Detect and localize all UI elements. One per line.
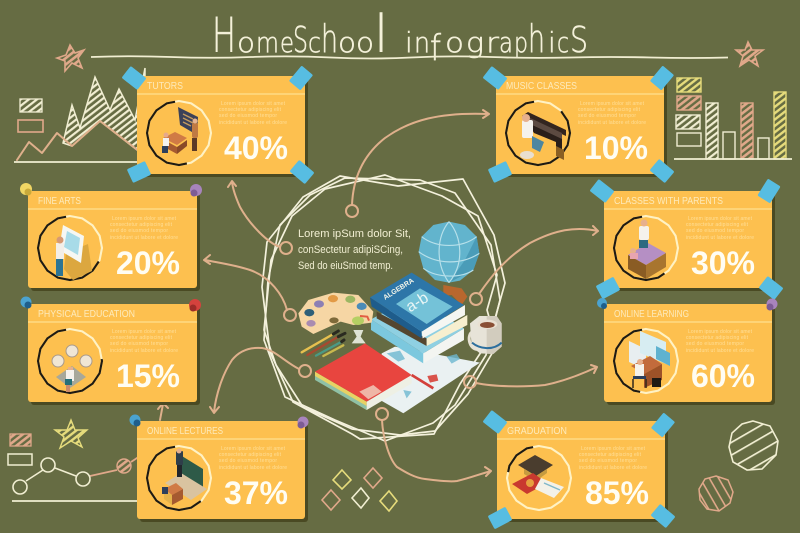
title: i [405, 26, 413, 59]
body text: sed do eiusmod tempor [579, 458, 637, 464]
pins: online learning [597, 298, 778, 310]
icon: student with screens [629, 331, 670, 388]
connector to physical education [158, 403, 168, 420]
panel: online lectures [137, 421, 308, 522]
panel heading: CLASSES WITH PARENTS [614, 196, 723, 207]
panel heading: ONLINE LEARNING [614, 309, 689, 320]
connector to classes with parents [470, 226, 598, 305]
title: i [548, 26, 556, 59]
title: c [308, 26, 321, 59]
connector to music classes [346, 110, 489, 217]
title: h [528, 17, 545, 61]
globe stand [443, 285, 467, 305]
peach hatched octagon [699, 476, 733, 511]
body text: consectetur adipiscing elit [686, 222, 749, 228]
title: S [293, 20, 308, 61]
title: o [445, 26, 464, 59]
body text: sed do eiusmod tempor [686, 228, 744, 234]
icon: globe [419, 222, 479, 283]
panel heading: MUSIC CLASSES [506, 81, 577, 92]
pins: physical education [20, 296, 201, 312]
percentage: 15% [116, 358, 180, 394]
central study illustration [298, 222, 502, 413]
connector to fine arts [204, 255, 296, 321]
title: p [514, 26, 528, 59]
body text: consectetur adipiscing elit [219, 452, 282, 458]
title [212, 5, 588, 69]
tape: graduation corners [483, 410, 675, 529]
pins: online lectures [130, 414, 308, 428]
star left [57, 45, 84, 71]
body text: Lorem ipsum dolor sit amet [221, 446, 286, 452]
panel heading: ONLINE LECTURES [147, 426, 223, 437]
panel: fine arts [28, 191, 200, 291]
icon: world map sheet [380, 347, 480, 413]
panel heading: FINE ARTS [38, 196, 81, 207]
body text: consectetur adipiscing elit [219, 107, 282, 113]
icon: painter palette [298, 293, 373, 334]
body text [579, 446, 647, 471]
body text: Lorem ipsum dolor sit amet [688, 216, 753, 222]
connector to graduation [376, 408, 491, 481]
body text: sed do eiusmod tempor [578, 113, 636, 119]
panel: tutors [137, 76, 308, 177]
body text: incididunt ut labore et dolore [578, 120, 646, 126]
panel: graduation [497, 421, 668, 522]
body text: Lorem ipsum dolor sit amet [221, 101, 286, 107]
icon: stacked textbooks: a-b [403, 289, 432, 316]
title: l [374, 5, 388, 65]
title: a [499, 26, 513, 59]
connector to online lectures [210, 348, 311, 413]
percentage: 60% [691, 358, 755, 394]
icon: red notebook [315, 343, 412, 410]
body text: incididunt ut labore et dolore [110, 348, 178, 354]
body text [686, 216, 754, 241]
body text: sed do eiusmod tempor [219, 458, 277, 464]
icon: red pencil [412, 375, 433, 388]
icon: parent and child at table [628, 220, 666, 279]
icon: graduation cap and diploma [512, 455, 564, 498]
percentage: 10% [584, 130, 648, 166]
panel heading: GRADUATION [507, 426, 567, 437]
title: H [212, 8, 236, 64]
body text [686, 329, 754, 354]
central intro text [298, 228, 411, 272]
body text: Lorem ipsum dolor sit amet [580, 101, 645, 107]
connector to online learning [464, 365, 597, 388]
icon: coffee mug [469, 316, 502, 354]
body text [219, 101, 287, 126]
panel: classes with parents [604, 191, 775, 291]
body text: Lorem ipsum dolor sit amet [688, 329, 753, 335]
body text [219, 446, 287, 471]
icon: stacked textbooks [370, 273, 467, 363]
percentage: 85% [585, 475, 649, 511]
body text: sed do eiusmod tempor [110, 341, 168, 347]
panel heading: TUTORS [147, 81, 183, 92]
pins: fine arts [20, 183, 202, 196]
percentage: 40% [224, 130, 288, 166]
title: g [466, 26, 484, 59]
title: S [570, 20, 588, 61]
central intro text: Sed do eiuSmod temp. [298, 260, 393, 272]
body text: consectetur adipiscing elit [110, 222, 173, 228]
title: o [356, 26, 374, 59]
title: r [486, 26, 500, 59]
central intro text: conSectetur adipiSCing, [298, 244, 403, 256]
progress ring [147, 446, 211, 510]
progress ring [506, 101, 570, 165]
tape: parents corners [590, 179, 783, 300]
body text: incididunt ut labore et dolore [686, 348, 754, 354]
progress ring [614, 329, 678, 393]
percentage: 37% [224, 475, 288, 511]
tape: tutors corners [122, 66, 314, 184]
progress ring [38, 329, 102, 393]
central intro text: Lorem ipSum dolor Sit, [298, 228, 411, 240]
white hatched octagon [729, 421, 778, 470]
body text [110, 329, 178, 354]
icon: laptop lecture [162, 448, 207, 505]
icon: teacher at blackboard [162, 107, 198, 154]
body text: incididunt ut labore et dolore [219, 465, 287, 471]
body text: sed do eiusmod tempor [686, 341, 744, 347]
percentage: 30% [691, 245, 755, 281]
title underline [91, 56, 728, 58]
body text: consectetur adipiscing elit [686, 335, 749, 341]
percentage: 20% [116, 245, 180, 281]
title: c [557, 26, 569, 59]
tape: music corners [483, 66, 674, 183]
title: e [280, 26, 294, 59]
star right [736, 42, 763, 66]
progress ring [38, 216, 102, 280]
body text: consectetur adipiscing elit [578, 107, 641, 113]
chart: bottom-left line chart [8, 420, 140, 501]
body text: incididunt ut labore et dolore [579, 465, 647, 471]
chart: mountain chalk chart [14, 68, 145, 162]
body text [578, 101, 646, 126]
body text: Lorem ipsum dolor sit amet [112, 216, 177, 222]
body text: incididunt ut labore et dolore [219, 120, 287, 126]
panel heading: PHYSICAL EDUCATION [38, 309, 135, 320]
central chalk web of polygons [262, 175, 505, 441]
icon: athlete with sports balls [52, 345, 92, 392]
body text: incididunt ut labore et dolore [110, 235, 178, 241]
connector to tutors [228, 181, 292, 254]
body text [110, 216, 178, 241]
title: o [338, 26, 356, 59]
body text: consectetur adipiscing elit [579, 452, 642, 458]
progress ring [614, 216, 678, 280]
title: o [237, 26, 255, 59]
panel: music classes [496, 76, 667, 177]
title: h [321, 17, 338, 61]
panel: physical education [28, 304, 200, 405]
icon: stacked textbooks: ALGEBRA [382, 277, 415, 302]
body text: Lorem ipsum dolor sit amet [112, 329, 177, 335]
body text: sed do eiusmod tempor [110, 228, 168, 234]
diamonds [322, 468, 397, 511]
icon: painter at easel [56, 225, 92, 280]
body text: incididunt ut labore et dolore [686, 235, 754, 241]
progress ring [507, 446, 571, 510]
icon: paint brushes [302, 331, 345, 356]
body text: Lorem ipsum dolor sit amet [581, 446, 646, 452]
title: m [256, 26, 279, 59]
chart: bar chalk chart [674, 78, 792, 159]
title: n [414, 26, 430, 59]
icon: pianist [520, 112, 566, 160]
icon: water jar [352, 330, 366, 343]
panel: online learning [604, 304, 775, 405]
body text: consectetur adipiscing elit [110, 335, 173, 341]
body text: sed do eiusmod tempor [219, 113, 277, 119]
progress ring [147, 101, 211, 165]
title: f [430, 28, 441, 69]
